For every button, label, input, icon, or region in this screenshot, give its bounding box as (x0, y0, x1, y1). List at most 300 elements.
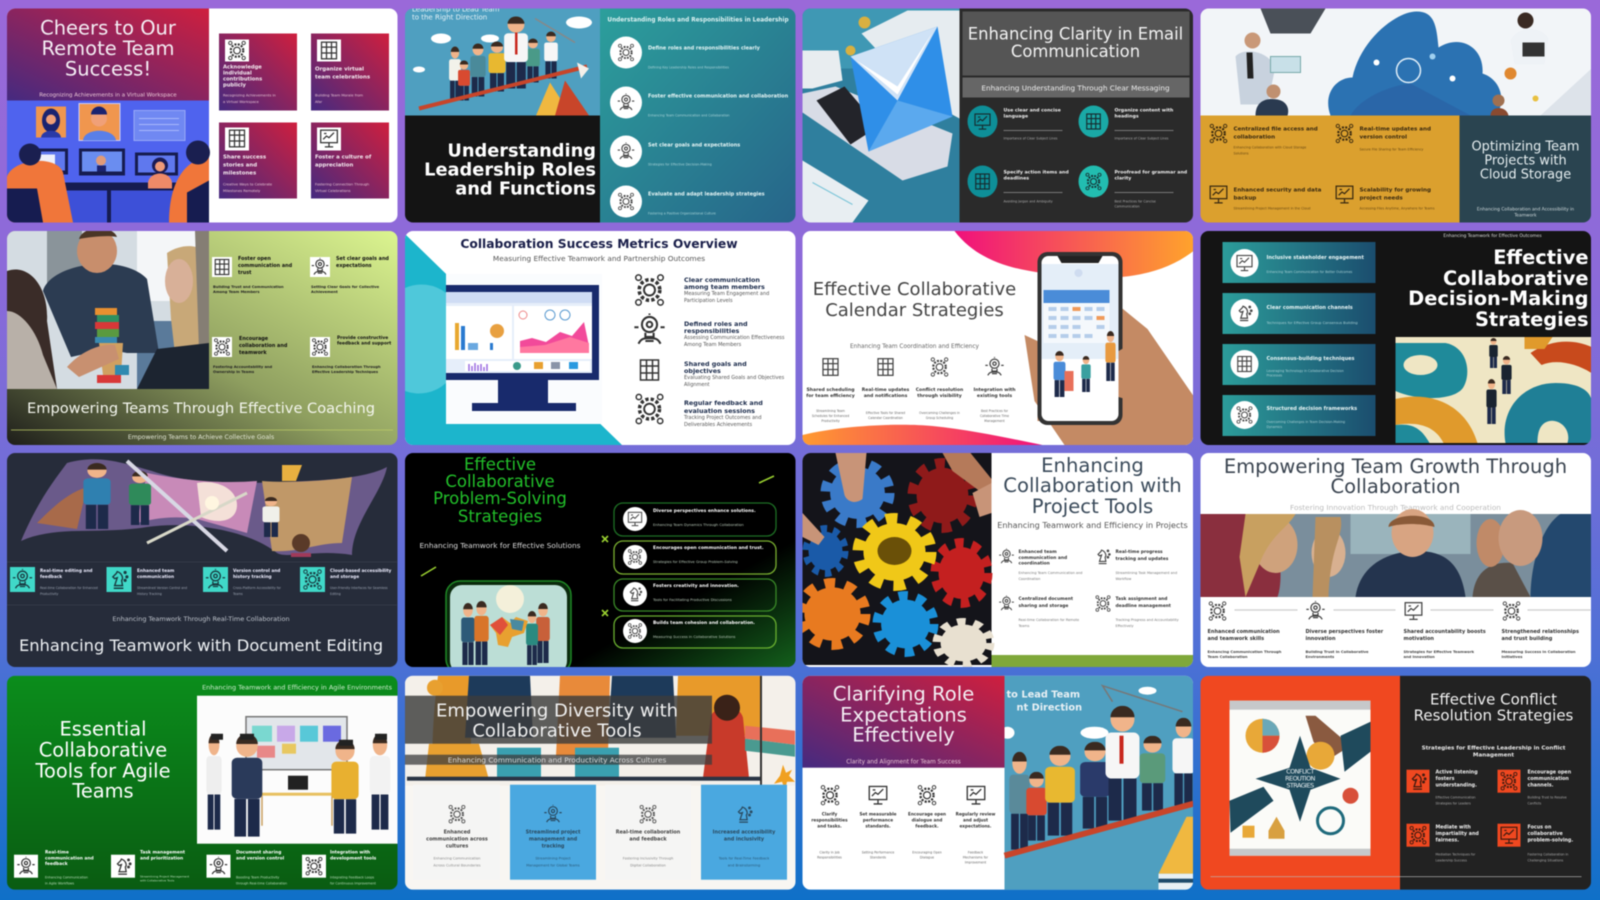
title: Effective (464, 455, 536, 474)
item 3: Fosters creativity and innovation. (653, 583, 739, 589)
title: Effectively (852, 724, 955, 747)
item 2: and prioritization (140, 856, 183, 862)
item 2: headings (1114, 114, 1139, 120)
item 4: Editing (330, 592, 341, 596)
item 2 (111, 850, 190, 883)
title: Strategies (1475, 308, 1588, 331)
item 4: collaborative (1528, 831, 1564, 837)
item 1 (811, 786, 848, 860)
item 1: Enhancing Communication (433, 857, 481, 861)
item 3 (908, 786, 946, 860)
text: Foster a culture of (315, 154, 372, 160)
item 2: Enhanced team (137, 568, 175, 574)
illustration: team on seesaw, enlarged (1000, 676, 1195, 890)
item 4: Dynamics (1266, 425, 1283, 429)
panel: Clarifying Role Expectations Effectively (802, 676, 1195, 890)
item 1: cultures (446, 844, 468, 850)
item 4: feedback and support (337, 340, 391, 346)
subtitle: Enhancing Understanding Through Clear Messaging (981, 84, 1170, 92)
illustration: people on abstract shapes (1396, 337, 1592, 443)
poster: conflict resolution (1230, 701, 1370, 856)
item 3 (1210, 186, 1322, 210)
note: Afar (315, 100, 323, 104)
item 4: Scalability for growing (1360, 188, 1431, 194)
item 2: Streamlined project (526, 830, 581, 836)
item 2 (1078, 106, 1174, 140)
panel: Understanding Leadership Roles and Functions (405, 6, 796, 222)
item 3 (605, 785, 691, 880)
photo: team collaborating (1200, 509, 1592, 597)
item 3: Shared goals and (684, 360, 747, 368)
title: Enhancing (1041, 454, 1144, 477)
item 4: Collaborative Time (980, 414, 1009, 418)
item 4: Challenging Situations (1528, 859, 1564, 863)
item 4: Measuring Success in Collaborative Solutions (653, 635, 735, 639)
illustration: team on seesaw, enlarged: nt Direction (1016, 703, 1082, 714)
item 4: Deliverables Achievements (684, 422, 753, 428)
icon (225, 128, 249, 150)
panel: Optimizing Team Projects with Cloud Storage (1200, 8, 1592, 222)
item 1: Enhancing Team Communication for Better Outcomes (1266, 270, 1353, 274)
item 4: development tools (330, 856, 377, 862)
item 2: Defined roles and (684, 320, 748, 328)
item 2: Setting Clear Goals for Collective (311, 285, 380, 289)
item 1: among team members (684, 283, 765, 291)
item 3: Leveraging Technology in Collaborative Decision (1266, 369, 1344, 373)
item 3 (610, 136, 740, 168)
item 3: Encourage open (908, 812, 946, 817)
item 3: Set clear goals and expectations (648, 142, 740, 148)
item 3: Boosting Team Productivity (236, 876, 279, 880)
text: individual (223, 70, 252, 76)
item 4: Initiatives (1502, 655, 1523, 659)
item 1: Building Trust and Communication (213, 285, 284, 289)
item 4 (1336, 186, 1435, 210)
item 3 (212, 336, 288, 374)
item 2: Streamlining Task Management and (1116, 571, 1177, 575)
item 1: Enhancing Communication Through (1208, 650, 1282, 654)
subtitle: Clarity and Alignment for Team Success (846, 760, 961, 766)
panel: Essential Collaborative Tools for Agile Teams (7, 676, 398, 890)
item 1: Importance of Clear Subject Lines (1004, 136, 1058, 140)
item 2: and notifications (864, 393, 908, 399)
item 1: and tasks. (817, 824, 842, 829)
item 2: Secure File Sharing for Team Efficiency (1360, 148, 1423, 152)
item 4 (701, 785, 787, 880)
item 2: Real-time updates and (1360, 126, 1431, 132)
title: and Functions (455, 178, 596, 200)
item: Share success stories and milestones (219, 122, 297, 198)
item 4: problem-solving. (1528, 838, 1573, 844)
item 1 (212, 256, 293, 294)
title: Teams (71, 780, 134, 803)
item 1: Among Team Members (213, 290, 260, 294)
item 1: trust (238, 270, 252, 276)
item 1: Across Cultural Boundaries (433, 864, 481, 868)
item 1: Productivity (821, 419, 840, 423)
item 1: Defining Key Leadership Roles and Responsibilities (648, 66, 729, 70)
title: Tools for Agile (34, 760, 171, 783)
item 3: teamwork (239, 350, 267, 356)
item: Organize virtual team celebrations (311, 34, 389, 110)
title: Collaborative Tools (472, 721, 642, 742)
item 1: Responsibilities (817, 856, 842, 860)
item 3: Teams (232, 592, 243, 596)
note: Fostering Connection Through (315, 182, 369, 186)
item 4: Increased accessibility (713, 830, 776, 836)
item 3: impartiality and (1436, 831, 1479, 837)
item 1: feedback (45, 861, 68, 867)
subtitle: Enhancing Teamwork for Effective Outcomes (1443, 233, 1542, 239)
item 3: objectives (684, 367, 721, 375)
title: Enhancing Teamwork with Document Editing (19, 636, 383, 655)
icon (317, 40, 341, 62)
illustration: envelope on laptop (802, 8, 960, 222)
panel: Effective Collaborative Calendar Strategies (802, 231, 1194, 445)
item 1 (1208, 602, 1282, 659)
item 1: Clarity in Job (819, 851, 840, 855)
title: Essential (60, 718, 146, 741)
title: Cheers to Our (40, 16, 177, 40)
photo: team around cloud table (1200, 8, 1592, 116)
item 4: clarity (1114, 176, 1131, 182)
item 4 (610, 186, 765, 218)
item 3: Leadership Success (1436, 859, 1467, 863)
subtitle: Enhancing Team Coordination and Efficiency (850, 344, 980, 350)
item 4: deadline management (1116, 603, 1171, 609)
title: Empowering Team Growth Through (1224, 455, 1567, 478)
item 2: channels. (1528, 783, 1554, 789)
item 2: Set measurable (860, 812, 897, 817)
item 4: and inclusivity (724, 837, 765, 843)
item 2 (860, 786, 897, 860)
title (405, 696, 712, 744)
item 3 (1404, 603, 1486, 659)
heading: Understanding Roles and Responsibilities in Leadership (607, 18, 789, 24)
item 2: innovation (1306, 636, 1336, 642)
item 2: Clear communication channels (1266, 305, 1353, 311)
item 2: Management for Global Teams (526, 864, 580, 868)
text: Acknowledge (223, 64, 262, 70)
item 1 (1222, 242, 1376, 283)
subtitle: Teamwork (1513, 212, 1537, 218)
item 4: and trust building (1502, 636, 1553, 642)
item 2 (862, 359, 910, 420)
item 4 (1502, 602, 1579, 659)
item 2: Streamlined Version Control and (137, 586, 187, 590)
item 4: Regularly review (956, 812, 996, 817)
text: appreciation (315, 162, 353, 168)
subtitle: Enhancing Teamwork for Effective Solutions (420, 541, 581, 550)
item 4: and adjust (963, 818, 988, 823)
item 1: Productivity (40, 592, 59, 596)
text: milestones (223, 170, 256, 176)
item 3: Digital Collaboration (630, 864, 666, 868)
item 2: tracking (542, 844, 565, 850)
item 1 (999, 548, 1082, 581)
subtitle: Strategies for Effective Leadership in Conflict (1422, 746, 1566, 752)
item 4: expectations. (959, 824, 992, 829)
note: a Virtual Workspace (223, 100, 260, 104)
item 3: Group Scheduling (926, 416, 953, 420)
item 4: Structured decision frameworks (1266, 406, 1357, 412)
item 1: Real-time Collaboration for Enhanced (40, 586, 98, 590)
item 2: Workflow (1116, 577, 1131, 581)
item 2: Enhancing Team Communication and Collaboration (648, 114, 730, 118)
title: Collaborative (39, 739, 167, 762)
item 3: Overcoming Challenges in (919, 411, 960, 415)
panel: Effective Collaborative Decision-Making Strategies (1200, 231, 1592, 445)
item 3: Tools for Facilitating Productive Discussions (652, 598, 732, 602)
item 4: Effectively (1116, 624, 1134, 628)
title (405, 116, 600, 222)
item 1: Enhanced (444, 830, 471, 836)
item 3: dialogue and (912, 818, 942, 823)
item 3: Specify action items and (1004, 170, 1069, 176)
item 2 (310, 256, 389, 294)
item 3: Strategies for Effective Decision-Making (648, 162, 712, 166)
item 4 (310, 335, 391, 374)
item 3: feedback. (915, 824, 939, 829)
item 4 (1498, 824, 1573, 863)
item 4: Feedback (968, 851, 983, 855)
item 3: Real-time Collaboration for Remote (1018, 618, 1079, 622)
item 1: Inclusive stakeholder engagement (1266, 255, 1364, 261)
item 1: communication and (45, 856, 94, 862)
title: Collaboration with (1003, 474, 1182, 497)
item 1: Diverse perspectives enhance solutions. (653, 508, 756, 514)
item 1 (1406, 770, 1478, 806)
item 1: responsibilities (811, 818, 848, 823)
item 2 (1498, 770, 1572, 806)
item 1: feedback (40, 574, 62, 580)
item 1: and teamwork skills (1208, 636, 1264, 642)
item 3 (614, 579, 776, 611)
item 1: fosters (1436, 776, 1455, 782)
item 1: coordination (1018, 560, 1050, 566)
item 3: sharing and storage (1018, 603, 1068, 609)
item 3: Streamlining Project Management in the Cloud (1234, 206, 1311, 210)
item 4 (973, 357, 1016, 423)
text: Share success (223, 154, 266, 160)
title: Effective (1493, 246, 1588, 269)
item 3: Teams (1018, 624, 1030, 628)
item 1: Use clear and concise (1004, 108, 1061, 114)
item 1: Coordination (1018, 577, 1040, 581)
item 4: Tools for Real-Time Feedback (718, 857, 770, 861)
item 4 (1078, 166, 1187, 208)
item 1: Enhancing Team Dynamics Through Collaboration (653, 523, 744, 527)
item 3: Fostering Accountability and (213, 365, 273, 369)
item 4: for Continuous Improvement (330, 882, 377, 886)
panel: Cheers to Our Remote Team Success (7, 8, 398, 222)
item 1 (636, 275, 769, 305)
item 3 (640, 360, 785, 388)
item 2: Encourages open communication and trust. (653, 545, 764, 551)
item 1 (1210, 124, 1318, 156)
title: Problem-Solving (433, 489, 567, 508)
item 2 (1098, 549, 1177, 581)
item 4: Task assignment and (1116, 596, 1167, 602)
item 2: History Tracking (137, 592, 162, 596)
item 2: expectations (336, 263, 372, 269)
item 2: version control (1360, 134, 1407, 140)
item 4: Accessing Files Anytime, Anywhere for Teams (1360, 206, 1435, 210)
poster title: REOUTION (1285, 775, 1316, 783)
title: Calendar Strategies (825, 300, 1004, 321)
title: Project Tools (1032, 495, 1153, 518)
item 3 (203, 567, 282, 596)
item 1: Team Collaboration (1208, 655, 1248, 659)
item 2: Standards (870, 856, 886, 860)
item 3: Encouraging Open (912, 851, 942, 855)
item 2: Building Trust in Collaborative (1306, 650, 1369, 654)
subtitle: Fostering Innovation Through Teamwork and Cooperation (1290, 503, 1501, 512)
subtitle: Enhancing Teamwork Through Real-Time Collaboration (112, 615, 290, 623)
item 1: Active listening (1436, 770, 1478, 776)
title panel: Cloud Storage (1480, 168, 1571, 182)
decorative bottom band (802, 425, 1042, 445)
decorative top blob (954, 231, 1194, 278)
item 3: Alignment (684, 382, 710, 388)
item 3: backup (1234, 196, 1256, 202)
item 4: Builds team cohesion and collaboration. (653, 620, 755, 626)
item 4 (636, 394, 763, 428)
item 3: Fostering Inclusivity Through (623, 857, 673, 861)
icon (317, 128, 341, 150)
decorative teal wedge (405, 234, 622, 445)
item 2 (1222, 293, 1376, 334)
item 2 (1306, 601, 1384, 659)
item 3: Cross-Platform Accessibility for (233, 586, 282, 590)
item 3: motivation (1404, 636, 1434, 642)
item 1: Enhancing Team Communication and (1018, 571, 1082, 575)
illustration: team on seesaw (405, 6, 600, 116)
item 4: Proofread for grammar and (1114, 170, 1187, 176)
subtitle: Enhancing Collaboration and Accessibility in (1477, 206, 1574, 212)
illustration: team on seesaw: to the Right Direction (412, 14, 487, 22)
title: Empowering Diversity with (436, 701, 678, 722)
item 2: Real-time progress (1116, 549, 1163, 555)
item 4 (956, 786, 996, 865)
item 1: Real-time editing and (40, 568, 92, 574)
item 2: Foster effective communication and collaboration (648, 94, 789, 100)
item 4: existing tools (977, 393, 1012, 399)
item 2: management and (529, 837, 578, 843)
item 2: Techniques for Effective Group Consensus Building (1266, 321, 1358, 325)
item 3: and Innovation (1404, 655, 1435, 659)
item 2: Importance of Clear Subject Lines (1114, 136, 1169, 140)
panel: features (1200, 116, 1460, 222)
item 4: Tracking Progress and Accountability (1114, 618, 1179, 622)
title: Collaborative (1443, 267, 1588, 290)
item 4: Cloud-based accessibility (330, 568, 392, 574)
note: Building Team Morale from (315, 94, 364, 98)
title: Understanding (447, 140, 596, 162)
item 1: communication across (426, 837, 488, 843)
item 4: Overcoming Challenges in Team Decision-Making (1266, 420, 1345, 424)
title panel (1460, 116, 1591, 222)
title: Success! (65, 58, 151, 80)
item 1: in Agile Workflows (45, 882, 75, 886)
subtitle (405, 755, 712, 765)
photo: diverse team illustration (405, 676, 795, 790)
item 2: Streamlining Project Management (140, 875, 190, 879)
item 2 (106, 567, 187, 596)
item 2: Building Trust to Resolve (1528, 796, 1567, 800)
panel: Enhancing Collaboration with Project Tools (800, 453, 1194, 667)
item 1: Clarify (822, 812, 837, 817)
item 3: through Real-time Collaboration (236, 882, 287, 886)
item 2 (610, 86, 789, 118)
item 4: project needs (1360, 196, 1403, 202)
item 4 (1222, 395, 1376, 436)
title block (802, 676, 1004, 768)
title: Collaborative (445, 472, 555, 491)
poster title: STRAGIES (1286, 782, 1314, 790)
item 1 (968, 106, 1062, 140)
poster title: CONFLICT (1286, 768, 1314, 776)
item 2: Task management (140, 850, 185, 856)
photo: hands joining gears (800, 453, 992, 665)
item 3: Shared accountability boosts (1404, 629, 1486, 635)
item 1: language (1004, 114, 1028, 120)
illustration: team on seesaw, enlarged: to Lead Team (1006, 690, 1080, 701)
item 2: responsibilities (684, 327, 740, 335)
panel: Collaboration Success Metrics Overview (405, 231, 796, 445)
item 2: Conflicts (1528, 802, 1542, 806)
item 1: for team efficiency (806, 393, 855, 399)
item 3: deadlines (1004, 176, 1029, 182)
title: Clarifying Role (833, 683, 974, 706)
item 2: Calendar Coordination (868, 416, 903, 420)
item 1 (806, 359, 855, 423)
item 4: Integration with (330, 850, 370, 856)
title: Communication (1011, 42, 1140, 61)
item 2: Assessing Communication Effectiveness (684, 335, 785, 341)
title: Leadership Roles (424, 160, 596, 180)
text: publicly (223, 82, 247, 88)
item 2: with Collaborative Tools (140, 879, 175, 883)
item 3 (916, 358, 963, 420)
item 2: Organize content with (1114, 108, 1173, 114)
item 1 (413, 785, 500, 880)
item 4: and storage (330, 574, 359, 580)
item 2 (1336, 124, 1431, 152)
item: Foster a culture of appreciation (311, 122, 389, 198)
item 3 (968, 166, 1069, 204)
item 3: Real-time collaboration (616, 830, 681, 836)
item 1: Enhanced communication (1208, 629, 1280, 635)
item 2: tracking and updates (1116, 556, 1169, 562)
text: Organize virtual (315, 66, 364, 72)
item 2: Achievement (311, 290, 338, 294)
title: Effective Conflict (1430, 691, 1557, 709)
subtitle: Management (1473, 753, 1514, 759)
item 4: Regular feedback and (684, 399, 763, 407)
panel: Enhancing Teamwork with Document Editing (7, 453, 398, 667)
title panel: Projects with (1484, 154, 1567, 168)
item 3: and version control (236, 856, 285, 862)
item 3: Ownership in Teams (213, 370, 254, 374)
item 2: communication (1528, 776, 1569, 782)
item 2: standards. (865, 824, 891, 829)
item 3: Document sharing (236, 850, 281, 856)
item 4: Integration with (973, 387, 1016, 393)
item 2: Diverse perspectives foster (1306, 629, 1384, 635)
item 1: Define roles and responsibilities clearly (648, 46, 761, 52)
item 4: Best Practices for (981, 409, 1009, 413)
